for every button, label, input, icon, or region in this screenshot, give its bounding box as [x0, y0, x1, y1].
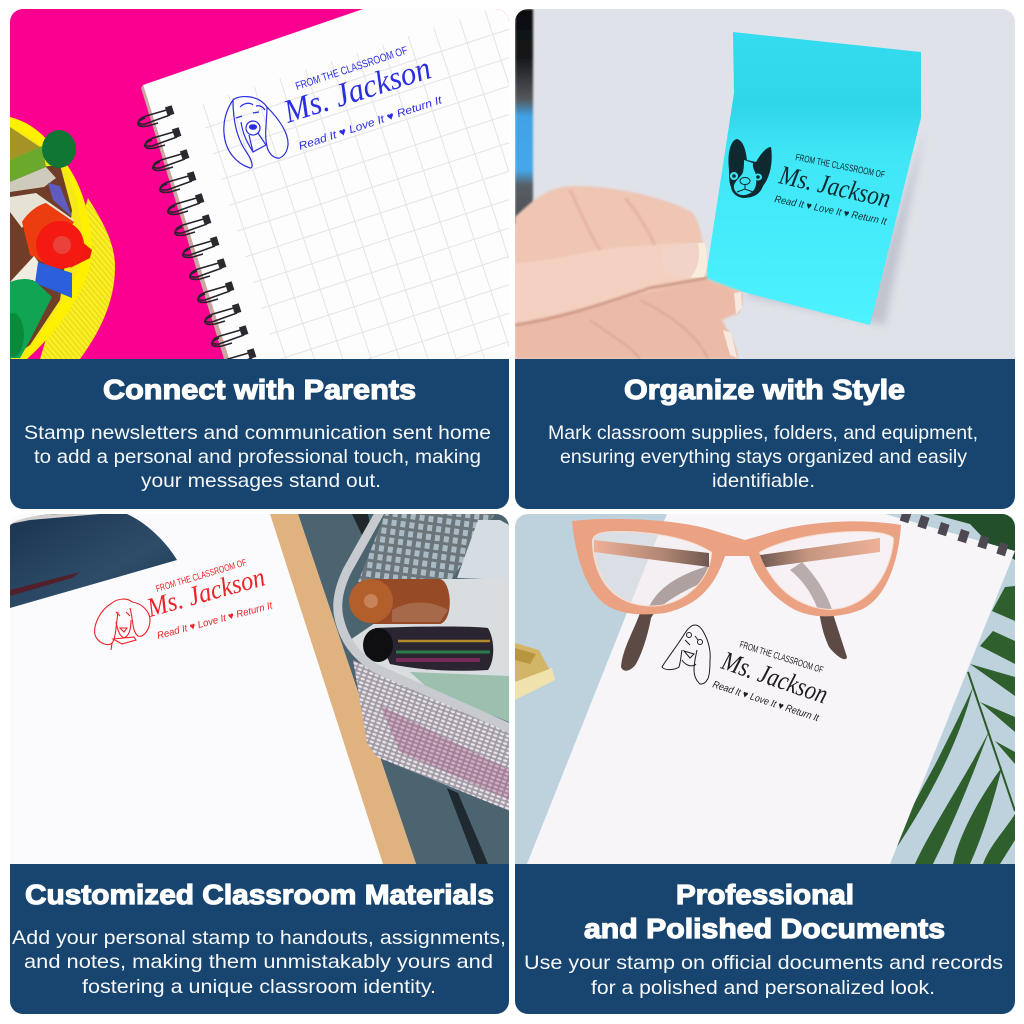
heading [584, 879, 945, 944]
photo: sticky note held in hand [515, 9, 1015, 359]
notebook page [141, 6, 512, 359]
text band [515, 864, 1015, 1014]
eyeglasses [572, 519, 901, 671]
notebook spiral binding [138, 105, 256, 369]
stamp impression: blue hound: Ms. Jackson [279, 51, 435, 131]
purple item [48, 183, 72, 217]
heading: Professional [676, 879, 854, 910]
palm leaves [897, 514, 1015, 864]
photo: notepad with glasses and palm leaf [515, 511, 1015, 864]
stamp impression: red beagle: Read It ♥ Love It ♥ Return It [156, 600, 275, 642]
icon: hound dog head outline [224, 97, 288, 168]
description: your messages stand out. [141, 470, 381, 492]
brown pen [349, 579, 450, 624]
clear pen barrels [350, 579, 509, 690]
dark clip [10, 514, 177, 608]
description: for a polished and personalized look. [591, 977, 935, 999]
description: Stamp newsletters and communication sent home [24, 422, 491, 444]
sticky note [705, 32, 921, 325]
panel: connect with parents [2, 6, 512, 509]
sticky note shadow [746, 151, 920, 326]
stamp impression: boston terrier: Ms. Jackson [776, 159, 894, 213]
description: Mark classroom supplies, folders, and equipment, [548, 422, 978, 444]
fingernails [723, 292, 742, 358]
photo: paper on clipboard with pen basket [10, 512, 512, 864]
description: fostering a unique classroom identity. [82, 976, 436, 998]
stamp impression: basset hound: Read It ♥ Love It ♥ Return It [711, 679, 821, 724]
icon: beagle head outline [95, 599, 150, 650]
stamp text: FROM THE CLASSROOM OF [155, 557, 248, 595]
lower mesh [353, 660, 510, 811]
stamp impression: blue hound [224, 45, 444, 168]
description [24, 422, 491, 492]
blue marker [35, 262, 72, 298]
temple arm left [621, 565, 712, 671]
photo: notebook on pink background [2, 6, 512, 369]
text band [10, 359, 509, 509]
basket rim [338, 512, 512, 729]
panel: customized classroom materials [10, 512, 512, 1014]
heading: Connect with Parents [103, 374, 416, 405]
text band [515, 359, 1015, 509]
stamp impression: boston terrier [728, 139, 894, 228]
panel: organize with style [515, 9, 1015, 509]
description: and notes, making them unmistakably yours and [24, 951, 493, 973]
icon: basset hound head outline [662, 625, 710, 684]
stamp impression: blue hound: Read It ♥ Love It ♥ Return It [297, 94, 444, 153]
description [524, 952, 1003, 999]
clipboard edge [270, 514, 416, 864]
notepad sheet [527, 514, 1015, 864]
white label [10, 256, 40, 283]
green lower marker [10, 279, 52, 358]
gold clip [515, 643, 555, 700]
markers [2, 130, 92, 358]
description: ensuring everything stays organized and easily [560, 446, 967, 468]
description: Add your personal stamp to handouts, assignments, [12, 927, 506, 949]
heading: Customized Classroom Materials [25, 879, 494, 910]
stamp text: FROM THE CLASSROOM OF [294, 45, 409, 93]
panel: professional and polished documents [515, 511, 1015, 1014]
stamp text: FROM THE CLASSROOM OF [794, 152, 886, 181]
stamp impression: basset hound [662, 625, 832, 724]
stamp impression: basset hound: Ms. Jackson [717, 645, 832, 709]
temple arm right [790, 562, 847, 659]
stamp impression: red beagle [95, 557, 275, 650]
dark object at edge [515, 9, 533, 224]
description [550, 425, 976, 487]
thumbnail [687, 243, 698, 244]
text band [10, 864, 509, 1014]
description: identifiable. [712, 470, 815, 492]
temple hinge bands [594, 540, 709, 567]
yellow marker bucket [10, 117, 115, 359]
description [12, 927, 506, 998]
upper mesh [358, 514, 495, 582]
green marker [10, 146, 46, 182]
stamp impression: red beagle: Ms. Jackson [143, 562, 268, 623]
mesh basket [338, 512, 512, 811]
red marker [10, 193, 74, 228]
description: to add a personal and professional touch, making [34, 446, 481, 468]
heading: Organize with Style [624, 374, 905, 405]
black pen [363, 626, 493, 671]
heading: and Polished Documents [584, 913, 945, 944]
notepad spiral [900, 511, 1009, 556]
wooden table [298, 514, 509, 864]
icon: terrier head [728, 139, 772, 198]
stamp text: FROM THE CLASSROOM OF [738, 639, 824, 676]
lenses [592, 531, 894, 610]
stamp impression: boston terrier: Read It ♥ Love It ♥ Return It [773, 194, 888, 228]
hand [515, 186, 743, 359]
frame [572, 519, 901, 616]
description: Use your stamp on official documents and records [524, 952, 1003, 974]
